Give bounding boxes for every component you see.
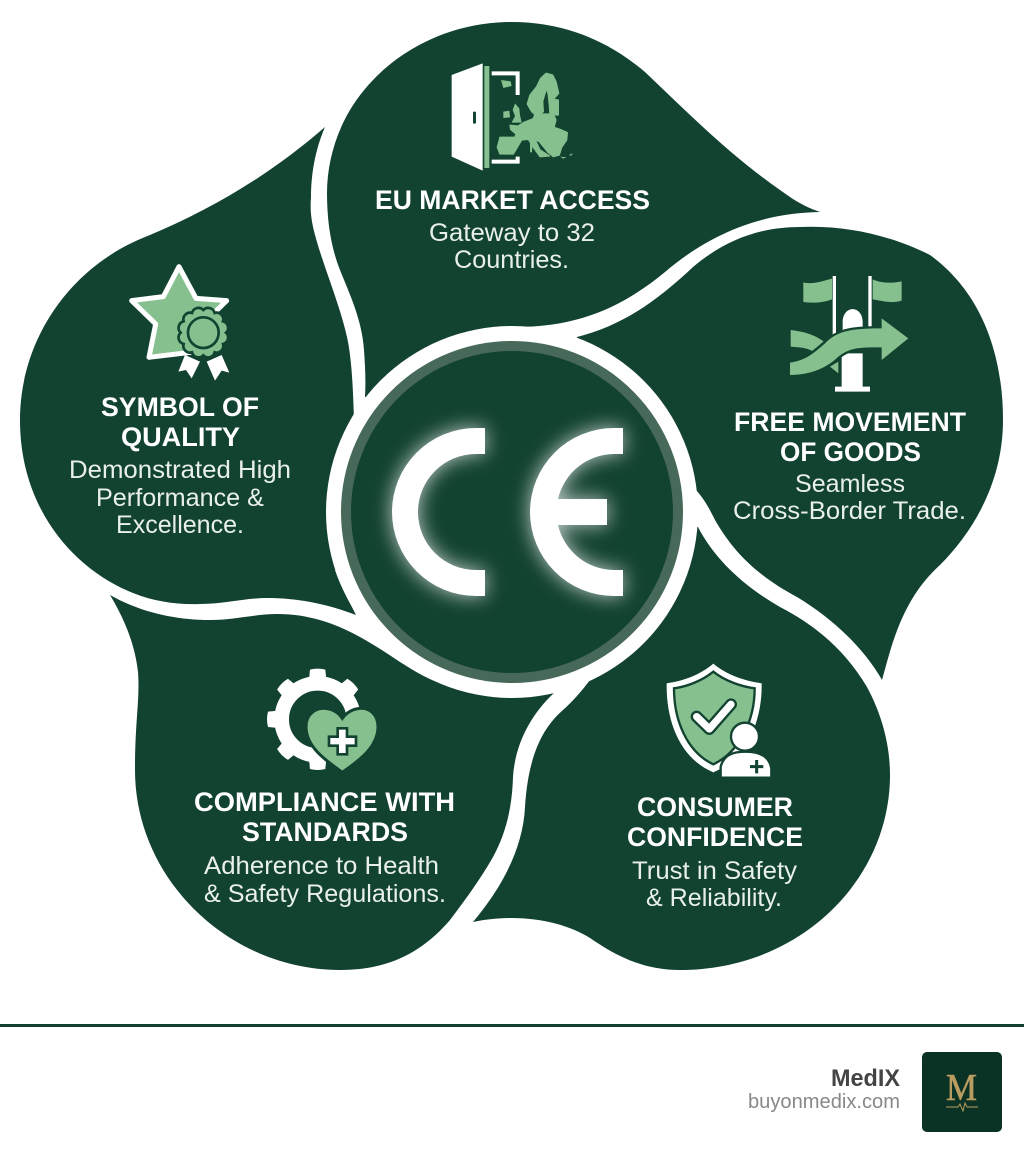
- petal shape: top: [327, 22, 820, 420]
- title: FREE MOVEMENT: [734, 407, 966, 437]
- description: Demonstrated High: [69, 456, 291, 484]
- title: COMPLIANCE WITH: [194, 787, 455, 817]
- title: QUALITY: [121, 422, 240, 452]
- title: [194, 787, 455, 847]
- panel: EU market access: [327, 22, 820, 420]
- description: [204, 852, 446, 908]
- description: Cross-Border Trade.: [733, 497, 966, 525]
- description: [69, 456, 291, 539]
- icon: flags, monument and arrow: [790, 276, 908, 392]
- description: Performance &: [96, 484, 264, 512]
- description: [429, 219, 595, 274]
- description: [733, 470, 966, 525]
- title: OF GOODS: [780, 437, 921, 467]
- icon: door opening to Europe: [452, 63, 573, 171]
- petal shape: left: [20, 127, 512, 615]
- footer: [0, 1024, 1024, 1132]
- center CE badge: [326, 326, 698, 698]
- icon: gear and heart: [267, 669, 378, 772]
- panel: consumer confidence: [473, 512, 890, 970]
- panel: compliance with standards: [110, 512, 555, 970]
- description: Trust in Safety: [632, 857, 798, 885]
- petal shape: lower right: [473, 512, 890, 970]
- description: & Safety Regulations.: [204, 880, 446, 908]
- description: [632, 857, 798, 912]
- title: EU MARKET ACCESS: [375, 185, 650, 215]
- title: [734, 407, 966, 467]
- title: STANDARDS: [242, 817, 408, 847]
- description: & Reliability.: [646, 884, 782, 912]
- logo: M: [946, 1067, 977, 1109]
- CE glow: [392, 428, 623, 596]
- icon: star with rosette: [132, 267, 229, 381]
- title: [627, 792, 803, 852]
- icon: shield with check and person: [667, 664, 771, 778]
- title: CONFIDENCE: [627, 822, 803, 852]
- description: Adherence to Health: [204, 852, 439, 880]
- logo: [922, 1052, 1002, 1132]
- description: Excellence.: [116, 511, 244, 539]
- description: Seamless: [795, 470, 905, 498]
- panel: symbol of quality: [20, 127, 512, 615]
- petal shape: right: [512, 227, 1003, 680]
- title: SYMBOL OF: [101, 392, 259, 422]
- petal shape: lower left: [110, 512, 555, 970]
- description: Countries.: [454, 246, 569, 274]
- brand url: buyonmedix.com: [748, 1091, 900, 1113]
- title: CONSUMER: [637, 792, 793, 822]
- title: [101, 392, 259, 452]
- panel: free movement of goods: [512, 227, 1003, 680]
- brand name: MedIX: [831, 1065, 900, 1092]
- description: Gateway to 32: [429, 219, 595, 247]
- CE mark: [392, 428, 623, 596]
